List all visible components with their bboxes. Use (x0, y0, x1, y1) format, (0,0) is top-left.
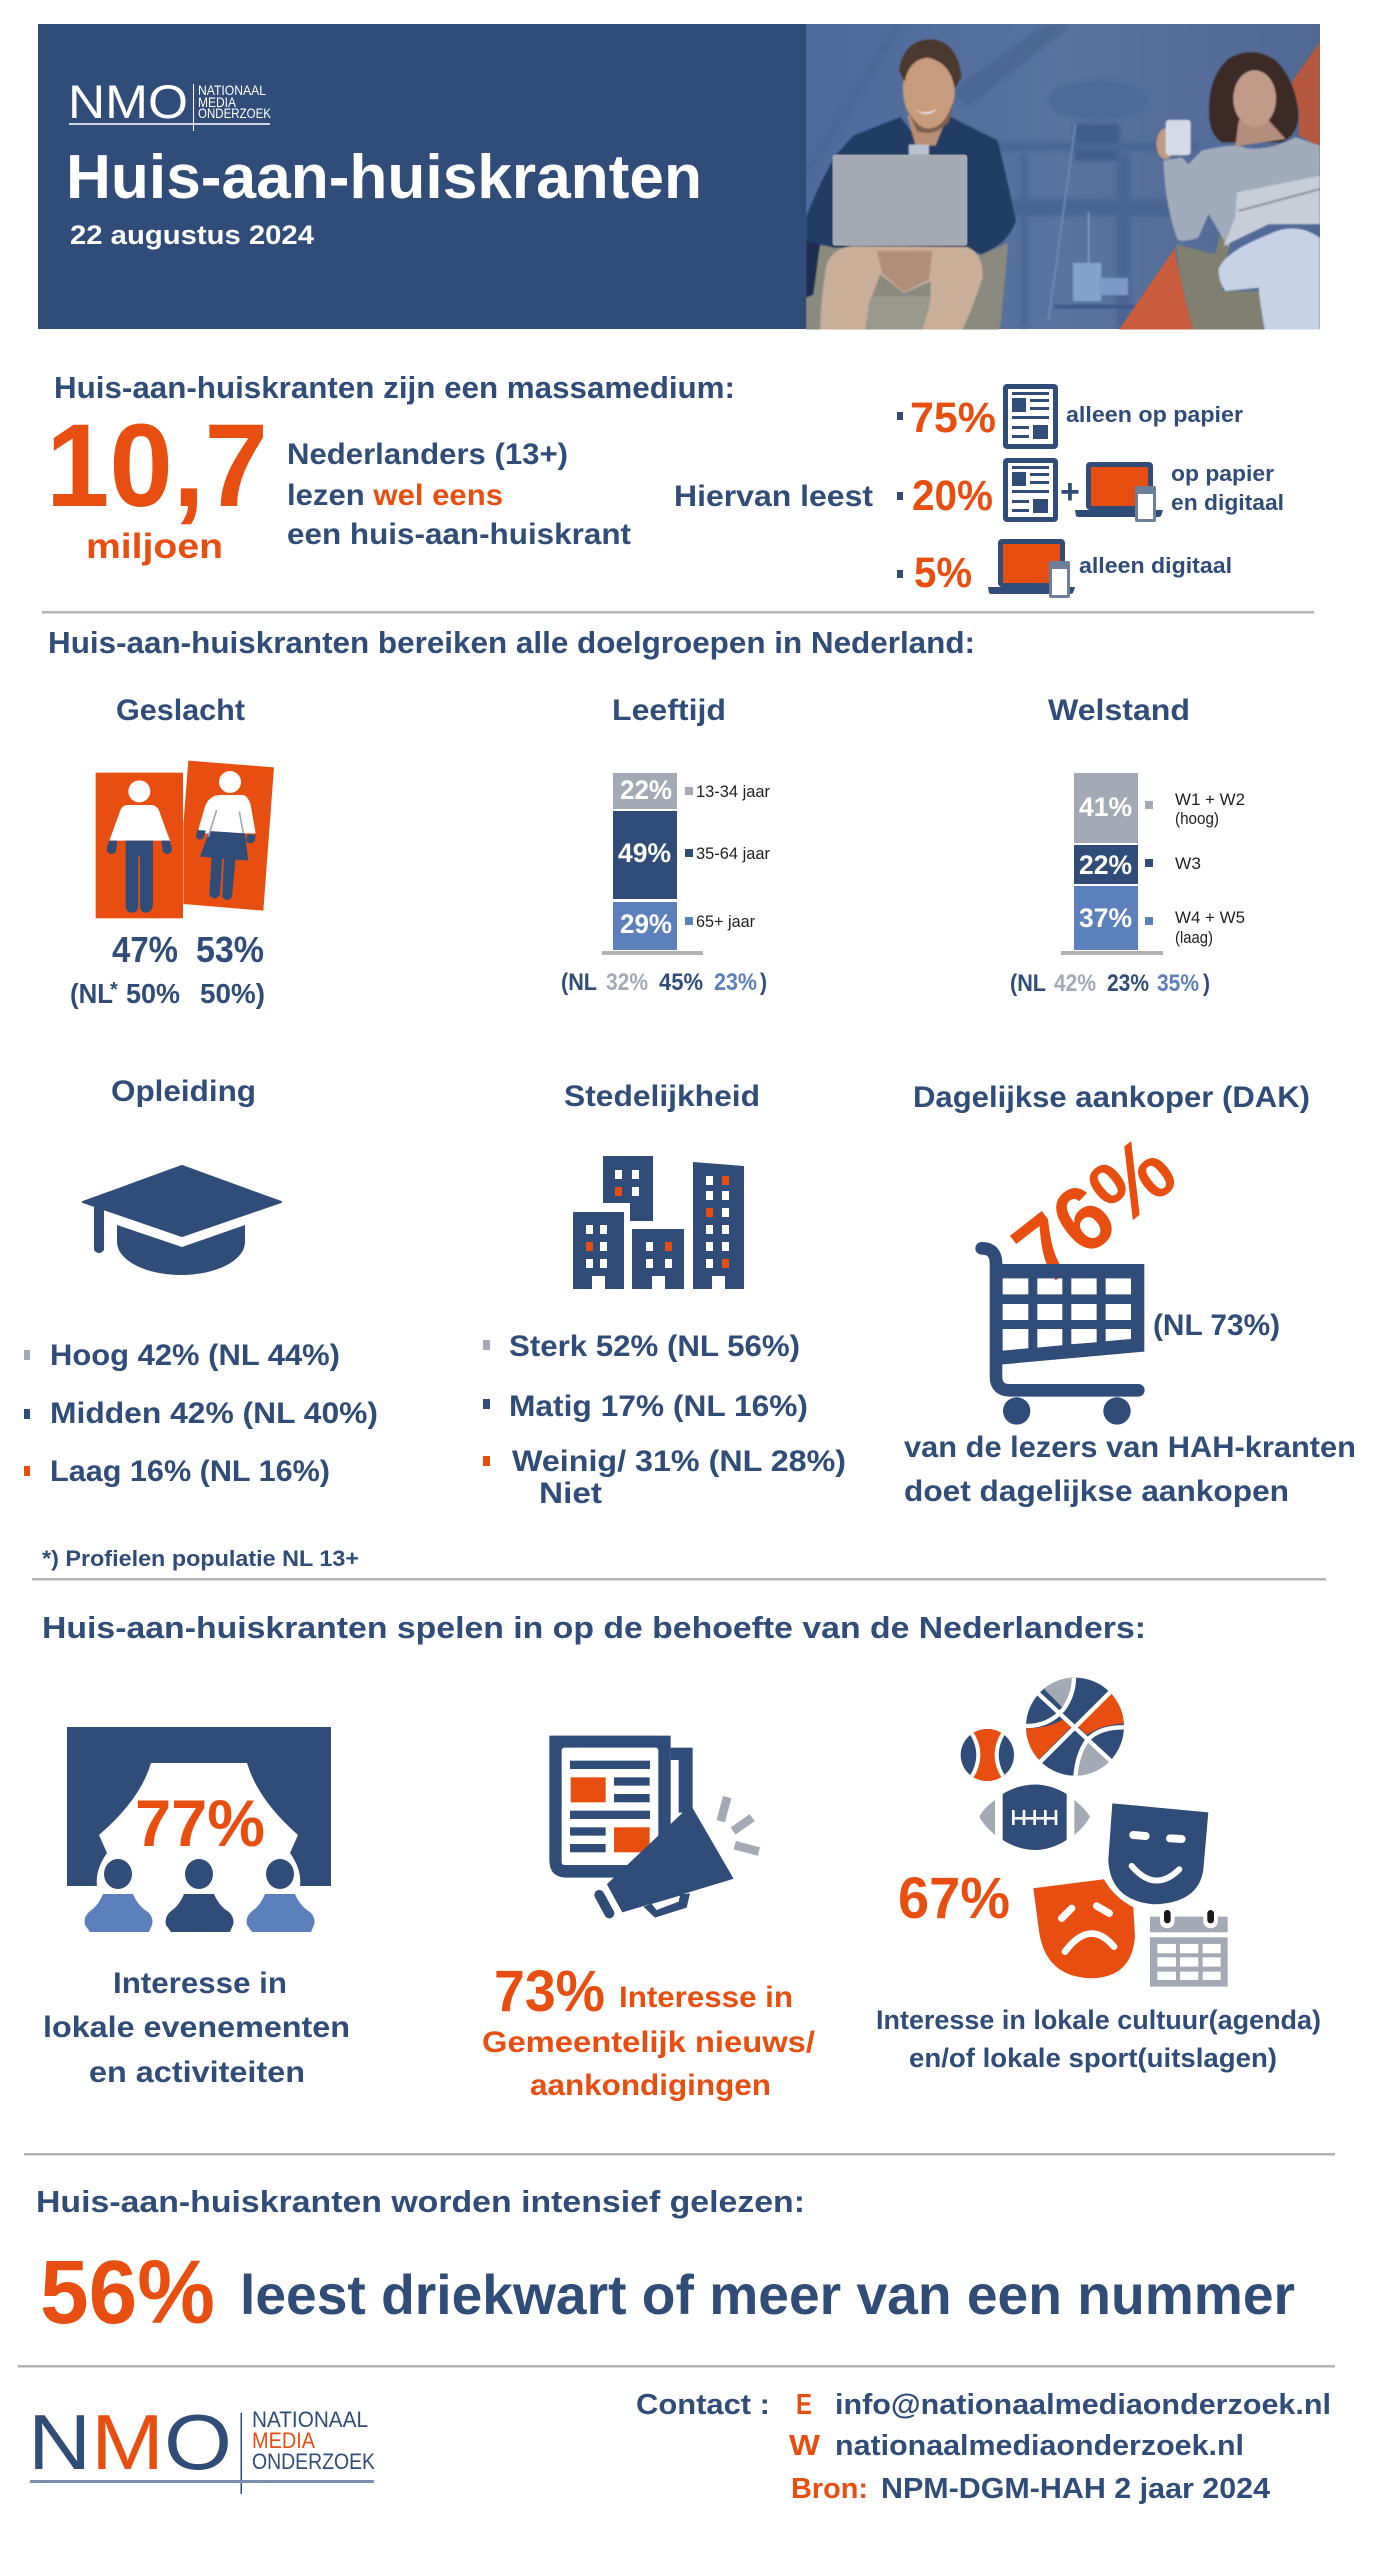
panel: leeftijd: Leeftijd (612, 694, 726, 727)
list: urbanity: Niet (539, 1477, 602, 1510)
description text: lezen wel eens (287, 479, 503, 512)
NL comparison: 50%) (200, 978, 265, 1009)
legend: wealth: W1 + W2 (1175, 790, 1245, 809)
icon: basketball (1023, 1675, 1127, 1778)
icon: calendar (1150, 1908, 1228, 1987)
row 20 percent (897, 458, 1284, 522)
icon: laptop and phone (988, 539, 1075, 598)
panel: opleiding: Opleiding (111, 1075, 256, 1108)
stacked bar: age: 49% (618, 838, 671, 868)
NL comparison (1010, 970, 1210, 997)
title: Huis-aan-huiskranten (66, 143, 702, 212)
list: education: Midden 42% (NL 40%) (50, 1397, 378, 1430)
contact details: Contact : (636, 2389, 770, 2421)
NL 73 percent: (NL 73%) (1153, 1309, 1280, 1342)
list: education (24, 1339, 378, 1488)
heading: Huis-aan-huiskranten worden intensief gelezen: (36, 2184, 805, 2219)
row 5 percent: alleen digitaal (1079, 553, 1232, 578)
row 75 percent: 75% (910, 394, 996, 442)
big number 10,7: 10,7 (46, 400, 268, 532)
caption (482, 1981, 816, 2102)
description text: Nederlanders (13+) (287, 438, 568, 471)
NL comparison: (NL (1010, 970, 1046, 997)
legend: wealth: W4 + W5 (1175, 908, 1245, 927)
list: education: Laag 16% (NL 16%) (50, 1455, 330, 1488)
icon: happy mask (1108, 1803, 1208, 1904)
stacked bar: age: 22% (620, 775, 672, 805)
icon: sad mask (1033, 1879, 1135, 1978)
panel: cultuur en sport: en/of lokale sport(uitslagen) (909, 2043, 1277, 2073)
NL comparison (561, 969, 767, 996)
panel: geslacht: 53% (196, 929, 264, 970)
row 75 percent: alleen op papier (1066, 402, 1243, 427)
panel: stedelijkheid (483, 1080, 846, 1510)
panel: dagelijkse aankoper: Dagelijkse aankoper (DAK) (913, 1081, 1310, 1114)
footer (28, 2389, 1331, 2505)
logo: NMO white: ONDERZOEK (198, 105, 272, 121)
NL comparison: 35% (1157, 970, 1199, 997)
header banner (38, 24, 1320, 334)
description text: een huis-aan-huiskrant (287, 518, 631, 551)
icon: newspaper (1003, 458, 1058, 522)
section: doelgroepen (24, 625, 1356, 1571)
legend: wealth: (hoog) (1175, 809, 1219, 828)
heading: Huis-aan-huiskranten spelen in op de behoefte van de Nederlanders: (42, 1610, 1146, 1645)
contact details: nationaalmediaonderzoek.nl (835, 2430, 1244, 2462)
logo: NMO colour: ONDERZOEK (252, 2449, 375, 2474)
NL comparison: 23% (1107, 970, 1149, 997)
legend: age (685, 782, 770, 931)
list: urbanity: Weinig/ 31% (NL 28%) (512, 1445, 846, 1478)
description text (287, 438, 631, 551)
icon: laptop and phone (1075, 462, 1163, 522)
row 75 percent (897, 384, 1243, 449)
56 percent: 56% (40, 2243, 215, 2343)
contact details (636, 2389, 1331, 2505)
icon: newspaper (1003, 384, 1058, 449)
legend: age: 13-34 jaar (696, 782, 770, 801)
NL comparison: (NL (70, 978, 113, 1009)
logo: NMO white: NATIONAAL (198, 82, 266, 98)
NL comparison: * (110, 979, 118, 1001)
stacked bar: wealth: 37% (1079, 903, 1132, 933)
panel: gemeentelijk nieuws (482, 1736, 816, 2102)
panel: dagelijkse aankoper (904, 1081, 1356, 1508)
icon: male and female figures (96, 761, 274, 918)
section: intensief gelezen (36, 2184, 1295, 2343)
contact details: info@nationaalmediaonderzoek.nl (835, 2389, 1331, 2421)
rotated 76 percent: 76% (996, 1117, 1194, 1304)
statement: leest driekwart of meer van een nummer (240, 2263, 1295, 2326)
icon: newspaper and megaphone (549, 1736, 760, 1918)
legend: wealth (1145, 790, 1245, 947)
plus sign: + (1060, 473, 1080, 511)
panel: geslacht (70, 694, 274, 1009)
icon: graduation cap (83, 1166, 281, 1275)
row 20 percent: 20% (912, 472, 993, 520)
section: behoefte (42, 1610, 1321, 2102)
section: massamedium (46, 370, 1284, 598)
panel: dagelijkse aankoper: doet dagelijkse aankopen (904, 1475, 1289, 1508)
heading: Huis-aan-huiskranten bereiken alle doelgroepen in Nederland: (48, 625, 975, 660)
stacked bar: wealth: 41% (1079, 792, 1132, 822)
footnote: *) Profielen populatie NL 13+ (42, 1546, 359, 1571)
caption (43, 1967, 350, 2089)
logo: NMO colour: NATIONAAL (252, 2407, 368, 2432)
icon: tennis ball (960, 1728, 1015, 1782)
row 20 percent: op papier (1171, 461, 1274, 486)
panel: evenementen (43, 1727, 350, 2089)
contact details: Bron: (791, 2473, 868, 2505)
73 percent: 73% (494, 1959, 605, 2024)
panel: welstand: Welstand (1048, 694, 1190, 727)
NL comparison: ) (1203, 970, 1210, 997)
stacked bar: age (602, 773, 703, 955)
NL comparison: (NL (561, 969, 597, 996)
hiervan leest: Hiervan leest (674, 480, 873, 513)
77 percent: 77% (135, 1786, 265, 1860)
caption: en activiteiten (89, 2056, 305, 2089)
row 20 percent: en digitaal (1171, 490, 1284, 515)
icon: american football (979, 1784, 1090, 1850)
list: urbanity (483, 1330, 846, 1510)
logo: NMO white: NMO (68, 75, 188, 128)
caption: van de lezers van HAH-kranten (904, 1431, 1356, 1464)
logo: NMO colour (28, 2398, 375, 2494)
NL comparison: 42% (1054, 970, 1096, 997)
caption: Gemeentelijk nieuws/ (482, 2026, 816, 2059)
contact details: NPM-DGM-HAH 2 jaar 2024 (881, 2473, 1270, 2505)
panel: leeftijd (561, 694, 770, 996)
stacked bar: wealth (1061, 773, 1163, 955)
panel: stedelijkheid: Stedelijkheid (564, 1080, 760, 1113)
NL comparison: 45% (659, 969, 703, 996)
icon: shopping cart (982, 1248, 1144, 1425)
panel: welstand (1010, 694, 1245, 997)
NL comparison: ) (760, 969, 767, 996)
icon: theatre with audience (67, 1727, 331, 1932)
date: 22 augustus 2024 (70, 220, 314, 250)
caption: Interesse in lokale cultuur(agenda) (876, 2005, 1321, 2035)
panel: opleiding (24, 1075, 378, 1488)
logo: NMO white (68, 75, 272, 131)
row 5 percent: 5% (914, 549, 972, 597)
legend: wealth: (laag) (1175, 928, 1213, 947)
panel: geslacht: Geslacht (116, 694, 245, 727)
contact details: W (789, 2430, 821, 2462)
heading: Huis-aan-huiskranten zijn een massamedium: (54, 370, 735, 405)
icons: sport balls, masks, calendar (960, 1675, 1228, 1987)
panel: cultuur en sport (876, 1675, 1321, 2073)
logo: NMO white: MEDIA (198, 94, 237, 110)
legend: age: 65+ jaar (696, 912, 755, 931)
67 percent: 67% (898, 1866, 1010, 1931)
row 5 percent (897, 539, 1232, 598)
caption: Interesse in (619, 1981, 793, 2014)
caption: aankondigingen (530, 2069, 771, 2102)
legend: age: 35-64 jaar (696, 844, 770, 863)
logo: NMO colour: NMO (28, 2398, 232, 2486)
photo: man with laptop and woman with newspaper (806, 24, 1320, 334)
logo: NMO colour: MEDIA (252, 2428, 315, 2453)
stacked bar: wealth: 22% (1079, 850, 1132, 880)
gender percentages: 47% (112, 929, 178, 970)
list: urbanity: Sterk 52% (NL 56%) (509, 1330, 800, 1363)
caption: lokale evenementen (43, 2011, 350, 2044)
NL comparison: 23% (714, 969, 757, 996)
legend: wealth: W3 (1175, 854, 1201, 873)
list: education: Hoog 42% (NL 44%) (50, 1339, 340, 1372)
stacked bar: age: 29% (620, 909, 672, 939)
NL comparison (70, 978, 265, 1009)
caption: Interesse in (113, 1967, 287, 2000)
icon: city buildings (573, 1156, 744, 1289)
list: urbanity: Matig 17% (NL 16%) (509, 1390, 808, 1423)
NL comparison: 32% (606, 969, 648, 996)
miljoen: miljoen (86, 527, 223, 566)
contact details: E (796, 2389, 812, 2421)
NL comparison: 50% (126, 978, 180, 1009)
